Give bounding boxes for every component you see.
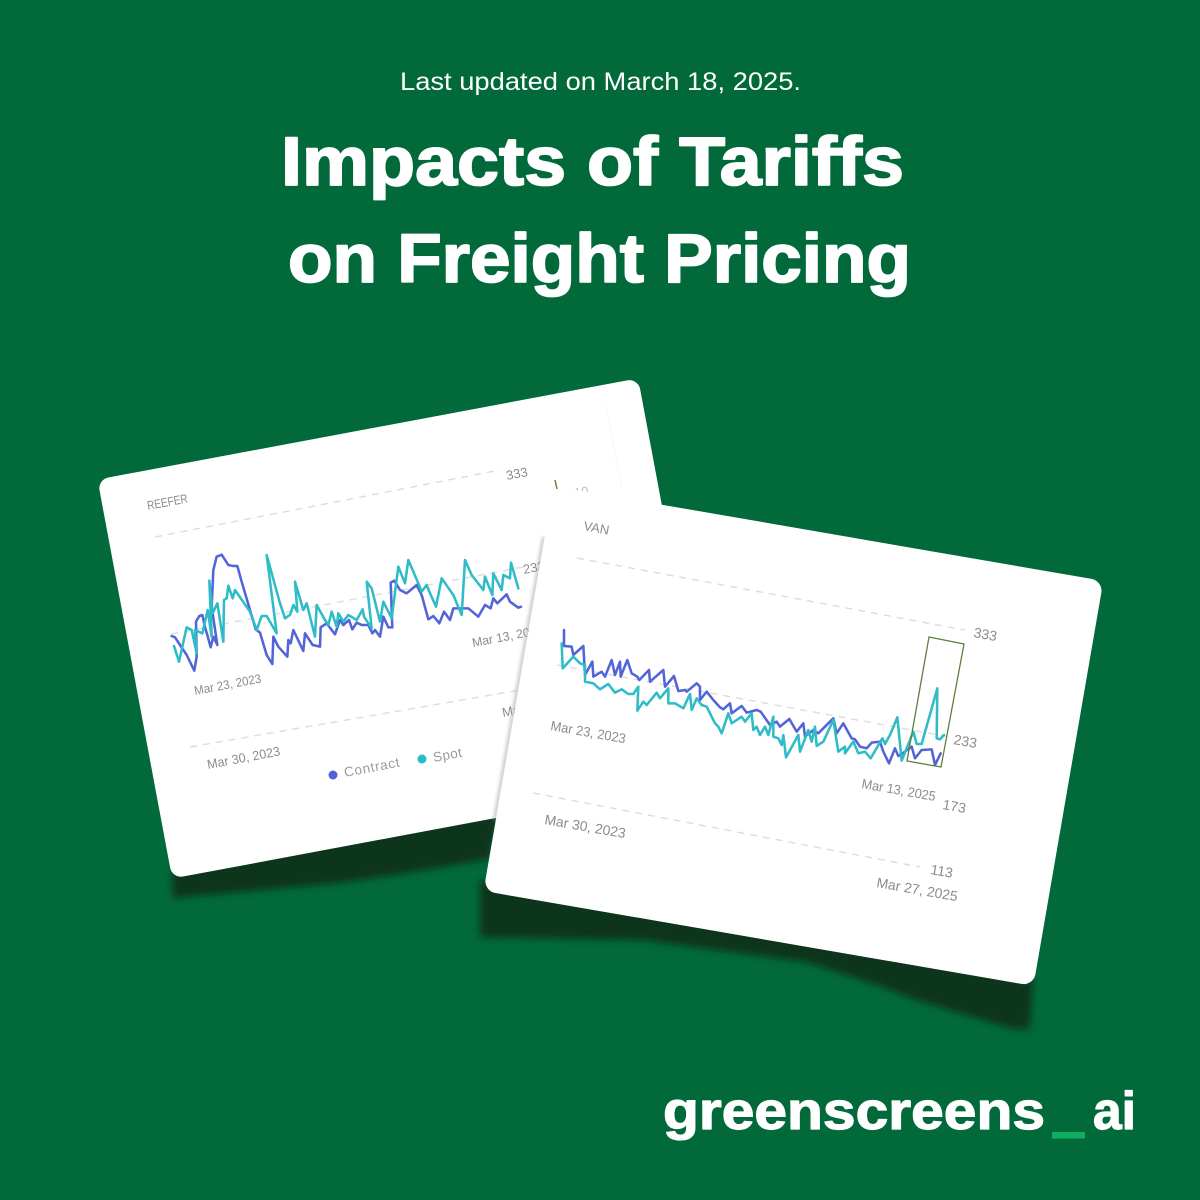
highlight box around recent spike	[907, 637, 964, 767]
reefer axis labels: Mar 30, 2023	[206, 743, 281, 772]
shadow: van card	[480, 880, 1033, 1029]
reefer legend: Contract	[343, 755, 401, 780]
reefer axis labels: 333	[505, 464, 529, 483]
van axis labels: 173	[941, 796, 967, 816]
van axis labels: Mar 23, 2023	[549, 718, 627, 746]
van axis labels	[543, 624, 998, 904]
van dashed grid lines	[533, 558, 965, 867]
van axis labels: Mar 13, 2025	[860, 776, 937, 804]
logo: greenscreens_ai: greenscreens	[663, 1082, 1045, 1141]
last updated line: Last updated on March 18, 2025.	[400, 68, 801, 96]
reefer legend: Spot	[432, 745, 463, 765]
shadow cast by van card on reefer card	[495, 537, 544, 820]
van heading: VAN	[582, 518, 611, 538]
van axis labels: Mar 27, 2025	[875, 874, 959, 904]
reefer axis labels: 233	[522, 558, 546, 577]
reefer axis labels: Mar 13, 2025	[471, 623, 544, 650]
logo: greenscreens_ai: ai	[1093, 1082, 1136, 1141]
title: on Freight Pricing	[288, 220, 911, 297]
reefer highlight fragment	[555, 480, 557, 489]
shadow: reefer card	[172, 808, 500, 898]
title: Impacts of Tariffs	[281, 123, 904, 200]
reefer axis labels: 310	[566, 483, 590, 502]
van axis labels: Mar 30, 2023	[543, 811, 627, 841]
reefer line chart	[172, 555, 521, 671]
reefer axis labels: Mar 27, 2025	[501, 691, 579, 720]
van axis labels: 333	[972, 624, 998, 644]
panel: reefer card	[98, 378, 713, 879]
van axis labels: 113	[929, 861, 954, 881]
reefer axis labels: Mar 23, 2023	[193, 672, 262, 698]
title	[281, 123, 911, 297]
reefer legend	[328, 745, 463, 780]
panel: van card	[484, 486, 1103, 986]
reefer axis labels	[193, 464, 590, 772]
logo underscore	[1052, 1132, 1085, 1138]
reefer dashed grid lines	[155, 470, 523, 747]
van line chart	[562, 630, 944, 765]
van axis labels: 233	[952, 731, 978, 751]
reefer heading: REEFER	[146, 492, 189, 513]
